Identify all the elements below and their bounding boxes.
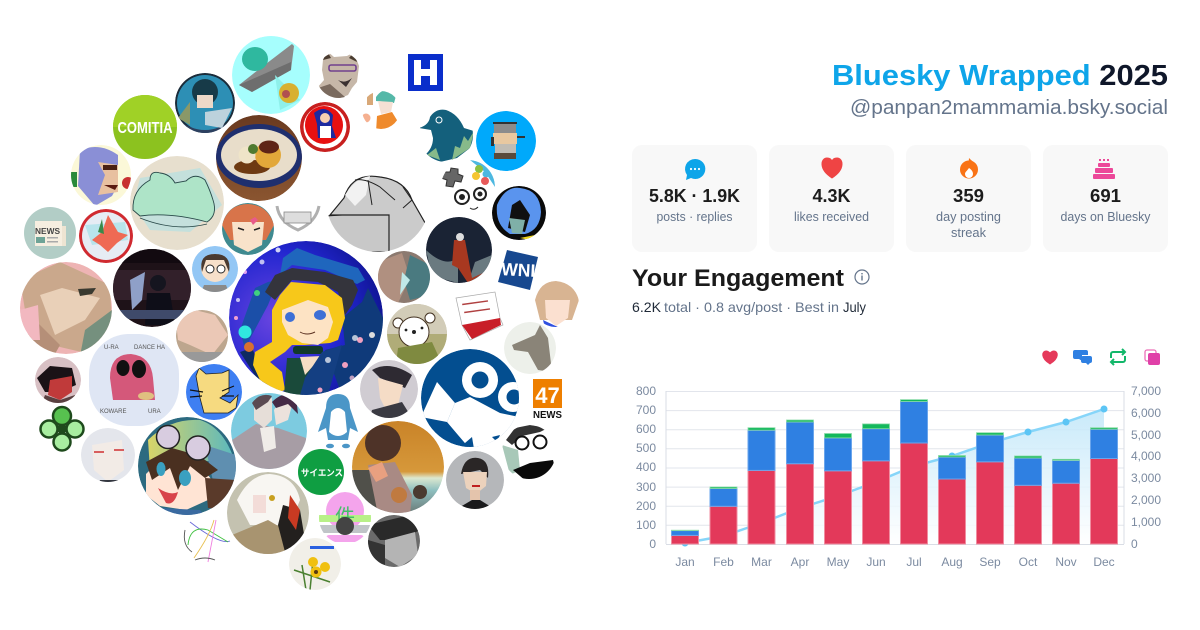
month labels: Apr: [791, 555, 809, 569]
month labels: May: [827, 555, 849, 569]
grid lines: [666, 392, 1124, 525]
avatar: black and white man: [368, 515, 420, 567]
avatar: red flower badge: [79, 209, 133, 263]
month labels: Mar: [751, 555, 772, 569]
avatar: tabby cat on blue: [186, 364, 242, 420]
left axis labels: 500: [636, 441, 656, 455]
left axis labels: 0: [649, 537, 656, 551]
avatar: pink ghost sticker: URA: [148, 409, 161, 415]
icon: 47 NEWS logo: 47: [535, 383, 560, 408]
avatar: wolf sketch: [504, 322, 556, 374]
avatar: sunflower bouquet: [289, 538, 341, 590]
avatar: man in orange hoodie: [362, 91, 397, 129]
avatar: silver-haired character: [81, 428, 135, 484]
avatar: bear with glasses: [319, 54, 359, 98]
handle: @panpan2mammamia.bsky.social: [850, 97, 1168, 119]
month labels: Jul: [906, 555, 922, 569]
avatar: white-haired character in red: [227, 472, 309, 556]
avatar: custard pudding plate: [216, 115, 302, 201]
engagement summary text: July: [843, 299, 866, 315]
likes bars: [672, 443, 1118, 544]
icon: replies legend: [1073, 350, 1092, 365]
right axis labels: 5,000: [1131, 428, 1161, 442]
avatar: colorful line sketch: [184, 520, 230, 562]
avatar: COMITIA logo: COMITIA: [118, 120, 173, 137]
avatar: science green badge: [298, 449, 344, 495]
icon: birthday cake: [1093, 159, 1115, 179]
avatar: watercolor girl: [20, 262, 112, 356]
avatar: kanji character badge: [319, 492, 371, 544]
avatar: dark figure: [426, 217, 492, 283]
icon: likes legend: [1043, 351, 1057, 364]
avatar: glasses boy on light blue: [192, 246, 238, 295]
left axis labels: 100: [636, 518, 656, 532]
avatar: science green badge: サイエンス: [301, 468, 343, 478]
panel: days on Bluesky stat card: days on Bluesky: [1060, 210, 1151, 224]
icon: 47 NEWS logo: NEWS: [533, 409, 562, 421]
avatar: UFO on cyan: [232, 36, 310, 114]
panel: streak stat card: [906, 145, 1031, 252]
avatar: woman portrait: [446, 451, 504, 512]
chart legend icons: [1043, 349, 1160, 365]
month labels: Jan: [675, 555, 695, 569]
avatar: news icon: NEWS: [35, 226, 60, 236]
month labels: Jun: [866, 555, 886, 569]
avatar: red and white box: [456, 292, 503, 340]
title: Bluesky Wrapped 2025: [832, 60, 1168, 92]
avatar: glasses manga on black and green: [502, 425, 554, 479]
avatar: orange-haired elf: [222, 203, 274, 255]
icon: heart: [822, 158, 842, 178]
panel: streak stat card: day posting: [936, 210, 1001, 224]
icon: flame: [960, 158, 978, 178]
icon: chat bubble: [685, 159, 705, 180]
avatar: dark stage scene: [113, 249, 191, 327]
avatar: hooded figure sketch: [328, 176, 426, 252]
panel: likes stat card: likes received: [794, 210, 869, 224]
avatar: COMITIA logo: [113, 95, 177, 159]
icon: H logo: [408, 54, 443, 91]
month labels: Oct: [1019, 555, 1038, 569]
right axis labels: 0: [1131, 537, 1138, 551]
left axis labels: 400: [636, 460, 656, 474]
left axis labels: 200: [636, 499, 656, 513]
avatar: clasped hands: [176, 310, 228, 362]
panel: posts stat card: [632, 145, 757, 252]
avatar: kanji character badge: 件: [335, 505, 355, 528]
icon: 47 NEWS logo: [533, 379, 562, 421]
engagement summary text: total · 0.8 avg/post · Best in: [664, 299, 839, 315]
avatar: frog sketch: [130, 156, 224, 250]
panel: posts stat card: posts · replies: [656, 210, 732, 224]
reposts bars: [672, 400, 1118, 531]
right axis labels: 6,000: [1131, 406, 1161, 420]
right axis labels: [1131, 384, 1161, 551]
right axis labels: 7,000: [1131, 384, 1161, 398]
right axis labels: 2,000: [1131, 493, 1161, 507]
avatar: two men in grey: [231, 393, 307, 472]
month labels: Dec: [1093, 555, 1115, 569]
avatar: girl at the sea: [352, 421, 444, 515]
avatar: pixel character on blue: [476, 111, 536, 171]
avatar: blue bird: [419, 108, 474, 162]
icon: penguin: [318, 394, 358, 448]
avatar bubble cluster: [20, 36, 579, 590]
avatar: pink ghost sticker: [89, 334, 179, 426]
left axis labels: [636, 384, 656, 551]
avatar: pink ghost sticker: U-RA: [104, 345, 119, 351]
cumulative area: [685, 409, 1104, 544]
cumulative line: [682, 406, 1108, 546]
icon: info: [855, 270, 869, 284]
avatar: pink ghost sticker: KOWARE: [100, 409, 126, 415]
panel: days on Bluesky stat card: [1043, 145, 1168, 252]
avatar: news icon: [24, 207, 76, 259]
panel: likes stat card: [769, 145, 894, 252]
replies bars: [672, 402, 1118, 535]
right axis labels: 1,000: [1131, 515, 1161, 529]
left axis labels: 300: [636, 480, 656, 494]
avatar: red anime badge: [300, 102, 350, 152]
avatar: blonde gothic girl: [229, 241, 385, 395]
avatar: goggles boy: [138, 417, 236, 516]
right axis labels: 4,000: [1131, 449, 1161, 463]
avatar: pink ghost sticker: DANCE HA: [134, 345, 165, 351]
month labels: [675, 555, 1115, 569]
avatar: WNI logo: [498, 250, 538, 290]
avatar: kiss photo: [378, 251, 430, 303]
avatar: WNI logo: WNI: [501, 259, 536, 281]
panel: streak stat card: streak: [951, 226, 987, 240]
avatar: blue penguin on black: [492, 186, 546, 240]
month labels: Sep: [979, 555, 1001, 569]
avatar: dark-haired boy with glasses: [175, 73, 235, 136]
month labels: Feb: [713, 555, 734, 569]
avatar: controller face: [441, 160, 495, 214]
avatar: book and laurel: [277, 206, 319, 230]
icon: quotes legend: [1145, 350, 1160, 365]
avatar: blonde anime girl: [533, 281, 579, 328]
avatar: wrestling mask: [71, 145, 134, 206]
avatar: manga man: [360, 360, 418, 418]
panel: streak stat card: 359: [953, 186, 984, 206]
left axis labels: 800: [636, 384, 656, 398]
month labels: Nov: [1055, 555, 1077, 569]
icon: green clover: [40, 407, 84, 450]
left axis labels: 600: [636, 422, 656, 436]
chart: monthly engagement bars with cumulative line: [636, 384, 1161, 569]
month labels: Aug: [941, 555, 963, 569]
avatar: man with red face: [35, 357, 81, 403]
panel: posts stat card: 5.8K · 1.9K: [649, 186, 740, 206]
right axis labels: 3,000: [1131, 471, 1161, 485]
panel: likes stat card: 4.3K: [812, 186, 850, 206]
heading: Your Engagement: Your Engagement: [632, 265, 844, 292]
avatar: white bear in green jacket: [387, 304, 447, 364]
avatar: blue and white logo: [421, 349, 519, 447]
panel: days on Bluesky stat card: 691: [1090, 186, 1121, 206]
left axis labels: 700: [636, 403, 656, 417]
engagement summary text: 6.2K: [632, 299, 662, 315]
icon: reposts legend: [1111, 349, 1125, 365]
